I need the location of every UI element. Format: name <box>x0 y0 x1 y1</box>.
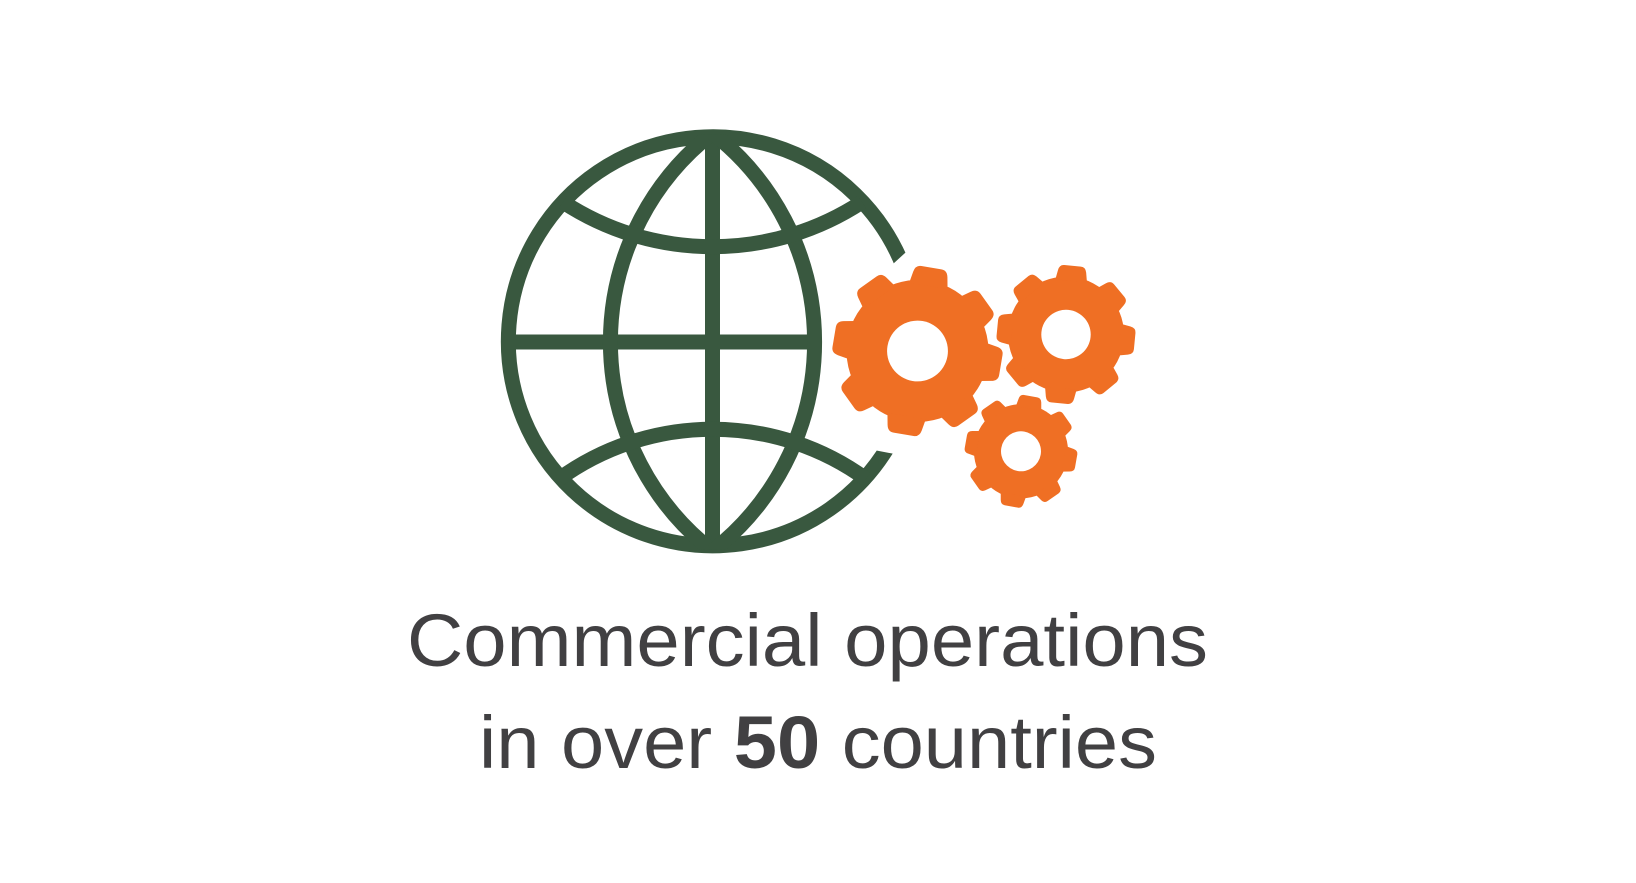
caption line 2: in over 50 countries <box>479 701 1157 784</box>
icon: medium gear <box>991 259 1141 410</box>
caption line 1: Commercial operations <box>407 599 1208 682</box>
caption text <box>407 599 1208 784</box>
icon: globe <box>504 133 930 551</box>
icon: small gear <box>956 386 1086 516</box>
icon: large gear <box>820 254 1015 448</box>
